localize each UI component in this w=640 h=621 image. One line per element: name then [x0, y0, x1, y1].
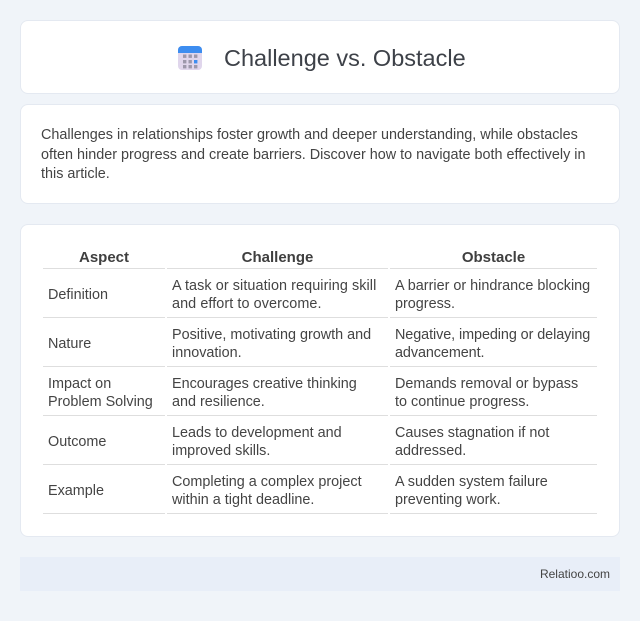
row: Outcome challenge [172, 425, 342, 459]
row: Example obstacle: preventing work. [395, 492, 501, 508]
text block: intro: Challenges in relationships foster growth and deeper understanding, while obstacles [41, 127, 578, 143]
panel: title card [20, 20, 620, 94]
table header: Aspect: Aspect [79, 249, 129, 266]
panel: table card [20, 224, 620, 537]
row: Nature challenge: Positive, motivating growth and [172, 327, 371, 343]
row: Outcome challenge: improved skills. [172, 443, 270, 459]
row: Impact challenge: Encourages creative thinking [172, 376, 357, 392]
row: Definition obstacle: progress. [395, 296, 455, 312]
row: Impact aspect: Impact on [48, 376, 111, 392]
row: Outcome challenge: Leads to development and [172, 425, 342, 441]
title: Challenge vs. Obstacle [224, 45, 466, 71]
icon: calendar [178, 46, 202, 70]
row: Definition challenge: and effort to overcome. [172, 296, 322, 312]
row: Definition obstacle [395, 278, 590, 312]
footer credit: Relatioo.com [540, 567, 610, 581]
row: Impact aspect [48, 376, 153, 410]
row: Outcome obstacle: addressed. [395, 443, 466, 459]
row: Impact obstacle: Demands removal or bypass [395, 376, 578, 392]
row: Impact challenge [172, 376, 357, 410]
row: Impact aspect: Problem Solving [48, 394, 153, 410]
row: Definition obstacle: A barrier or hindrance blocking [395, 278, 590, 294]
row: Definition challenge [172, 278, 376, 312]
table header: Challenge: Challenge [242, 249, 313, 266]
row: Nature aspect: Nature [48, 336, 91, 352]
row: Example obstacle [395, 474, 548, 508]
panel: intro card [20, 104, 620, 204]
row: Nature obstacle: advancement. [395, 345, 484, 361]
row: Definition challenge: A task or situation requiring skill [172, 278, 376, 294]
row: Definition aspect: Definition [48, 287, 108, 303]
text block: intro: this article. [41, 166, 110, 182]
row: Impact challenge: and resilience. [172, 394, 265, 410]
row: Example obstacle: A sudden system failure [395, 474, 548, 490]
row: Nature challenge: innovation. [172, 345, 242, 361]
text block: intro: often hinder progress and create barriers. Discover how to navigate both effectively in [41, 146, 585, 162]
row: Nature obstacle: Negative, impeding or delaying [395, 327, 590, 343]
row: Example challenge [172, 474, 362, 508]
row: Nature challenge [172, 327, 371, 361]
row: Example challenge: Completing a complex project [172, 474, 362, 490]
table header: Obstacle: Obstacle [462, 249, 525, 266]
row: Nature obstacle [395, 327, 590, 361]
row: Outcome aspect: Outcome [48, 434, 106, 450]
text block: intro [41, 127, 585, 182]
row: Impact obstacle: to continue progress. [395, 394, 529, 410]
row: Example aspect: Example [48, 483, 104, 499]
footer bar [20, 557, 620, 591]
row: Example challenge: within a tight deadline. [172, 492, 314, 508]
row: Outcome obstacle: Causes stagnation if not [395, 425, 549, 441]
row: Outcome obstacle [395, 425, 550, 459]
row: Impact obstacle [395, 376, 578, 410]
